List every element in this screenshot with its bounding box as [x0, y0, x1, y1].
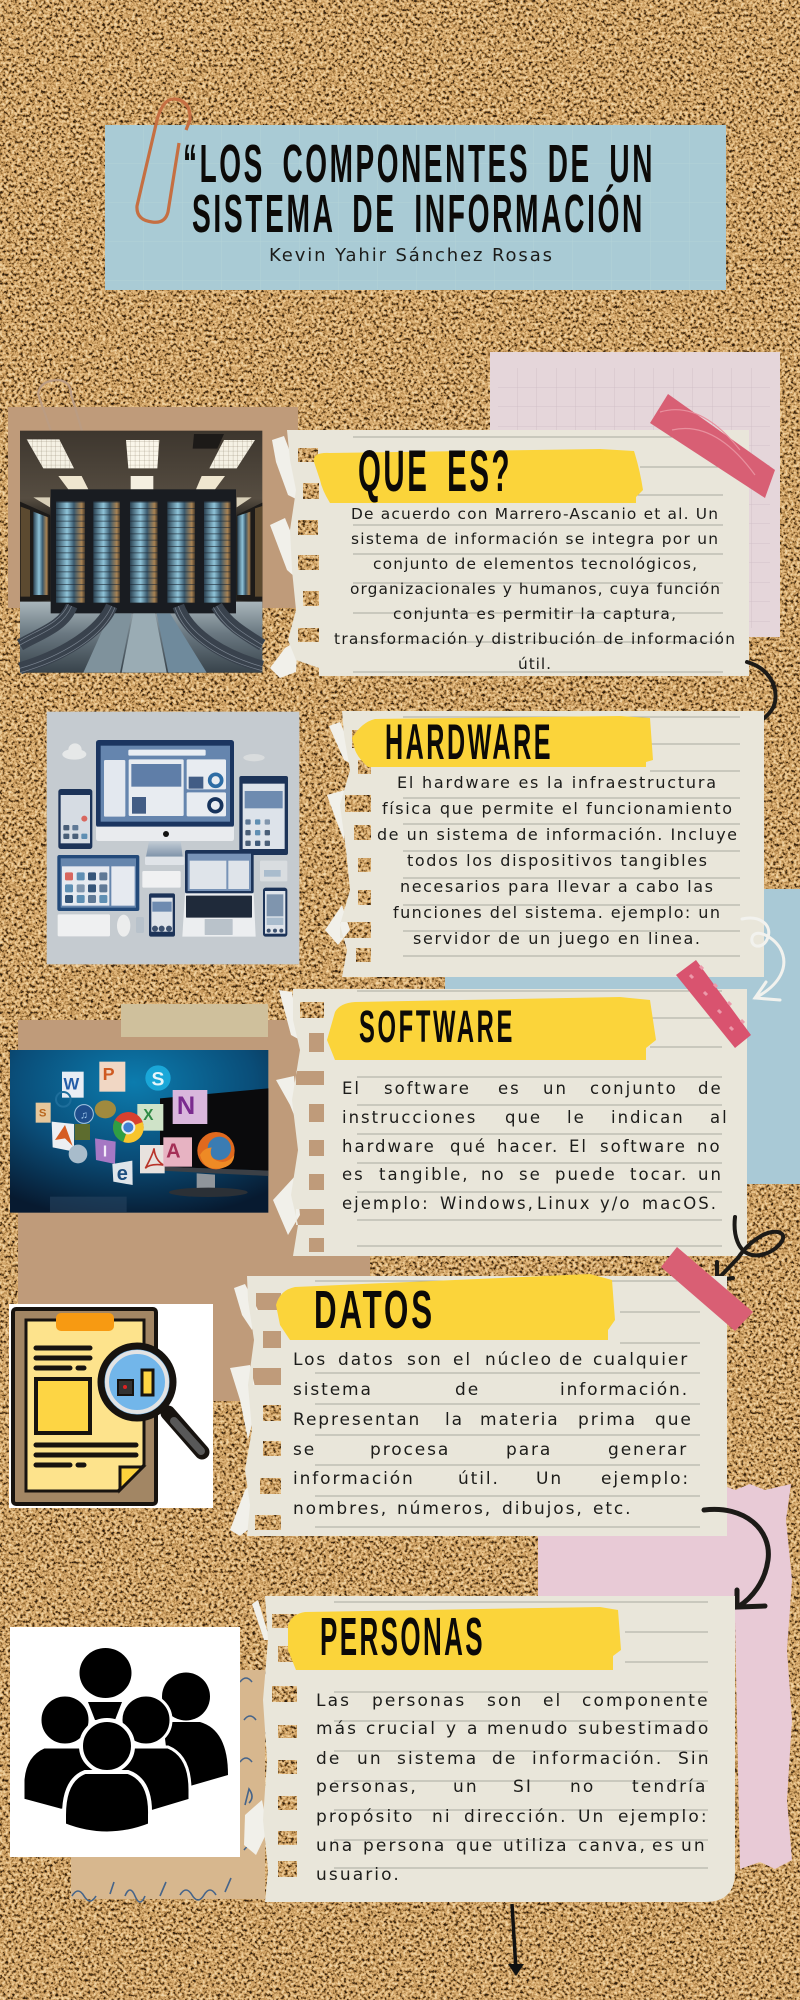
body text: una	[316, 1836, 354, 1856]
body text: no	[697, 1137, 722, 1156]
body text: generar	[608, 1440, 688, 1460]
body text	[293, 1350, 693, 1519]
icon: copper paperclip	[137, 99, 190, 222]
body text: macOS.	[642, 1194, 718, 1213]
body text: de	[698, 1079, 723, 1098]
yellow highlight	[288, 1607, 621, 1670]
body text: y/o	[600, 1194, 631, 1213]
body text: prima	[578, 1410, 637, 1430]
body text: software	[600, 1137, 687, 1156]
yellow highlight	[327, 997, 656, 1060]
monitor	[160, 1088, 268, 1197]
body text: que	[505, 1108, 542, 1127]
panel: note software	[273, 989, 747, 1256]
torn paper strips	[273, 990, 300, 1235]
access icon	[163, 1137, 192, 1167]
body text: hardware	[342, 1137, 436, 1156]
body text: transformación y distribución de información	[334, 630, 735, 648]
panel: pink torn paper	[538, 1484, 792, 1869]
heading: main title	[183, 134, 655, 244]
acrobat icon	[140, 1145, 165, 1173]
body text: conjunto	[590, 1079, 678, 1098]
sharepoint icon: S	[39, 1108, 47, 1120]
access icon: A	[166, 1140, 181, 1162]
ruled lines	[403, 717, 740, 956]
right tablet	[239, 776, 288, 855]
body text	[342, 1079, 729, 1213]
infopath icon: I	[103, 1144, 107, 1161]
body text: servidor de un juego en linea.	[413, 929, 700, 948]
image: devices	[47, 712, 299, 964]
body text: que	[456, 1836, 494, 1856]
front person	[64, 1720, 150, 1834]
torn paper strips	[230, 1284, 258, 1536]
reflective floor	[20, 602, 262, 673]
arrow: black loop	[717, 1217, 783, 1280]
floor cables	[20, 604, 262, 673]
paint icon	[95, 1100, 116, 1118]
panel: note hardware	[325, 711, 764, 977]
skype icon: S	[152, 1069, 165, 1090]
body text: tendría	[632, 1777, 708, 1797]
image: data clipboard icon	[9, 1304, 213, 1508]
clipboard	[13, 1309, 156, 1504]
body text: números,	[397, 1499, 492, 1519]
wide tablet	[57, 855, 139, 911]
body text: datos	[338, 1350, 395, 1370]
body text: para	[506, 1440, 552, 1460]
note paper with punched holes	[340, 711, 764, 977]
body text: dibujos,	[502, 1499, 584, 1519]
body text: es	[652, 1836, 676, 1856]
body text: menudo	[487, 1719, 569, 1739]
body text: sistema	[293, 1380, 373, 1400]
body text: sistema	[397, 1749, 478, 1769]
body text: puede	[555, 1165, 617, 1184]
body text: no	[570, 1777, 595, 1797]
magnifier handle	[168, 1413, 202, 1452]
body text: conjunta es permitir la captura,	[393, 605, 676, 623]
body text: más	[316, 1719, 358, 1739]
body text: y	[446, 1719, 458, 1739]
ruled lines	[315, 1281, 700, 1527]
body text: hacer.	[497, 1137, 559, 1156]
body text: tangible,	[379, 1165, 470, 1184]
tape: pink dotted	[676, 960, 751, 1048]
body text: Sin	[678, 1749, 711, 1769]
panel: note que es	[270, 430, 749, 678]
body text: de un sistema de información. Incluye	[377, 825, 737, 844]
body text: materia	[480, 1410, 560, 1430]
yellow highlight	[276, 1274, 615, 1340]
yellow highlight	[352, 716, 653, 767]
panel: note personas	[244, 1596, 735, 1902]
body text: un	[698, 1165, 723, 1184]
beige tape	[121, 1004, 268, 1037]
image: server room	[20, 431, 262, 673]
side racks	[20, 502, 262, 604]
laptop	[182, 850, 256, 937]
lens bars	[118, 1380, 133, 1395]
body text: física que permite el funcionamiento	[382, 799, 732, 818]
panel: title card	[105, 125, 726, 290]
orange clip	[56, 1313, 114, 1331]
powerpoint icon	[99, 1062, 125, 1092]
body text: qué	[450, 1137, 487, 1156]
onenote icon	[173, 1090, 207, 1124]
panel: note datos	[230, 1274, 727, 1536]
body text: subestimado	[578, 1719, 710, 1739]
firefox icon	[197, 1132, 235, 1169]
back people	[80, 1648, 228, 1786]
body text: Un	[578, 1807, 605, 1827]
small phone	[149, 893, 175, 937]
image: software icons	[10, 1050, 268, 1213]
body text: cualquier	[593, 1350, 689, 1370]
body text: núcleo	[485, 1350, 553, 1370]
excel icon	[137, 1104, 163, 1131]
note paper with punched holes	[291, 989, 747, 1256]
left phone	[58, 789, 92, 849]
body text: un	[681, 1836, 707, 1856]
body text: es	[342, 1165, 365, 1184]
body text: información.	[560, 1380, 689, 1400]
word icon: W	[63, 1074, 79, 1093]
clouds	[62, 743, 265, 761]
panel: kraft paper behind software photo	[18, 1004, 370, 1401]
body text: componente	[582, 1691, 710, 1711]
text rows	[36, 1348, 136, 1465]
body text: es	[498, 1079, 521, 1098]
arrow: black downward	[508, 1904, 524, 1976]
icon: small paperclip	[38, 380, 82, 431]
body text: nombres,	[293, 1499, 388, 1519]
body text: El	[569, 1137, 588, 1156]
heading: hardware: HARDWARE	[385, 714, 553, 770]
body text: canva,	[578, 1836, 647, 1856]
middle people	[23, 1695, 190, 1812]
panel: blue paper behind software	[445, 889, 800, 1184]
torn paper strips	[270, 436, 298, 678]
ruled lines	[357, 991, 722, 1246]
body text: ejemplo:	[342, 1194, 430, 1213]
arrow: white curly	[742, 918, 784, 1000]
body text: Las	[316, 1691, 351, 1711]
body text: son	[407, 1350, 443, 1370]
heading: software: SOFTWARE	[359, 1001, 515, 1052]
ie icon: e	[117, 1163, 128, 1185]
body text: etc.	[593, 1499, 632, 1519]
server racks	[51, 489, 236, 613]
body text: El hardware es la infraestructura	[397, 773, 716, 792]
body text: que	[655, 1410, 693, 1430]
yellow highlight	[314, 449, 643, 503]
body text: persona	[363, 1836, 446, 1856]
body text: ni	[432, 1807, 452, 1827]
note paper with punched holes	[245, 1276, 727, 1536]
keyboards and mouse	[58, 861, 287, 937]
body text: no	[481, 1165, 506, 1184]
body text: funciones del sistema. ejemplo: un	[393, 903, 720, 922]
body text: El	[342, 1079, 361, 1098]
word icon	[62, 1072, 84, 1098]
body text	[334, 505, 735, 673]
heading: datos: DATOS	[314, 1280, 435, 1340]
body text: Los	[293, 1350, 327, 1370]
globe icon	[69, 1145, 87, 1163]
body text: De acuerdo con Marrero-Ascanio et al. Un	[351, 505, 718, 523]
panel: note personas: PERSONAS	[320, 1607, 485, 1667]
body text: ejemplo:	[601, 1469, 690, 1489]
heading: que es: QUE ES?	[358, 439, 512, 504]
matlab icon	[52, 1122, 74, 1152]
body text: información	[293, 1469, 415, 1489]
body text: usuario.	[316, 1865, 401, 1885]
note paper with punched holes	[263, 1596, 735, 1902]
body text: de	[316, 1749, 341, 1769]
tape: pink striped	[650, 394, 775, 498]
arrow: black curved to personas	[704, 1509, 768, 1607]
photos icon	[75, 1124, 90, 1140]
torn paper strips	[244, 1600, 270, 1855]
body text: utiliza	[503, 1836, 569, 1856]
body text: de	[455, 1380, 480, 1400]
powerpoint icon: P	[103, 1064, 115, 1084]
itunes icon: ♫	[80, 1110, 88, 1122]
body text: Representan	[293, 1410, 421, 1430]
skype icon	[145, 1065, 171, 1091]
body text	[316, 1691, 711, 1885]
ruled lines	[334, 1602, 708, 1868]
body text: propósito	[316, 1807, 415, 1827]
body text: un	[543, 1079, 568, 1098]
body text: personas,	[316, 1777, 418, 1797]
right phone	[263, 888, 287, 937]
body text: tocar.	[630, 1165, 688, 1184]
onenote icon: N	[177, 1092, 195, 1120]
body text: útil.	[518, 655, 551, 673]
body text: el	[543, 1691, 562, 1711]
ruled lines	[353, 437, 723, 672]
body text: el	[453, 1350, 472, 1370]
body text: Windows,	[440, 1194, 535, 1213]
excel icon: X	[143, 1107, 154, 1124]
body text: SI	[513, 1777, 533, 1797]
desktop reflection	[50, 1197, 127, 1212]
author name: Kevin Yahir Sánchez Rosas	[269, 245, 552, 266]
body text: dirección.	[464, 1807, 568, 1827]
body text: instrucciones	[342, 1108, 477, 1127]
body text: a	[467, 1719, 480, 1739]
body text: todos los dispositivos tangibles	[407, 851, 707, 870]
body text: de	[492, 1749, 517, 1769]
body text: le	[567, 1108, 586, 1127]
ie icon	[112, 1161, 133, 1185]
itunes icon	[75, 1105, 93, 1123]
body text: personas	[372, 1691, 466, 1711]
infopath icon	[95, 1138, 116, 1164]
body text	[377, 773, 737, 948]
panel: pink grid paper	[490, 352, 780, 637]
body text: se	[293, 1440, 316, 1460]
body text: de	[559, 1350, 584, 1370]
body text: se	[519, 1165, 542, 1184]
body text: procesa	[370, 1440, 450, 1460]
body text: indican	[611, 1108, 685, 1127]
body text: conjunto de elementos tecnológicos,	[373, 555, 697, 573]
body text: software	[384, 1079, 471, 1098]
chrome icon	[113, 1112, 144, 1143]
body text: información.	[532, 1749, 663, 1769]
body text: un	[453, 1777, 479, 1797]
panel: handwritten paper	[71, 1670, 265, 1902]
arrow: black curved to hardware	[738, 662, 776, 738]
body text: necesarios para llevar a cabo las	[400, 877, 713, 896]
yellow square	[36, 1379, 90, 1433]
magnifier lens	[101, 1346, 173, 1418]
panel: kraft paper behind server photo	[8, 407, 298, 608]
body text: Un	[536, 1469, 563, 1489]
body text: al	[710, 1108, 729, 1127]
tape: pink over datos	[661, 1247, 753, 1331]
body text: ejemplo:	[618, 1807, 709, 1827]
note paper with punched holes	[287, 430, 749, 676]
body text: útil.	[458, 1469, 500, 1489]
body text: Linux	[537, 1194, 591, 1213]
ceiling lights	[27, 434, 255, 507]
sharepoint icon	[36, 1103, 51, 1123]
body text: sistema de información se integra por un	[351, 530, 718, 548]
desktop monitor	[96, 740, 234, 865]
outlook style ring	[56, 1092, 71, 1107]
body text: la	[445, 1410, 464, 1430]
torn paper strips	[325, 722, 354, 945]
body text: son	[487, 1691, 523, 1711]
body text: crucial	[366, 1719, 437, 1739]
body text: organizacionales y humanos, cuya función	[350, 580, 720, 598]
image: people icon	[10, 1627, 240, 1857]
body text: un	[357, 1749, 383, 1769]
